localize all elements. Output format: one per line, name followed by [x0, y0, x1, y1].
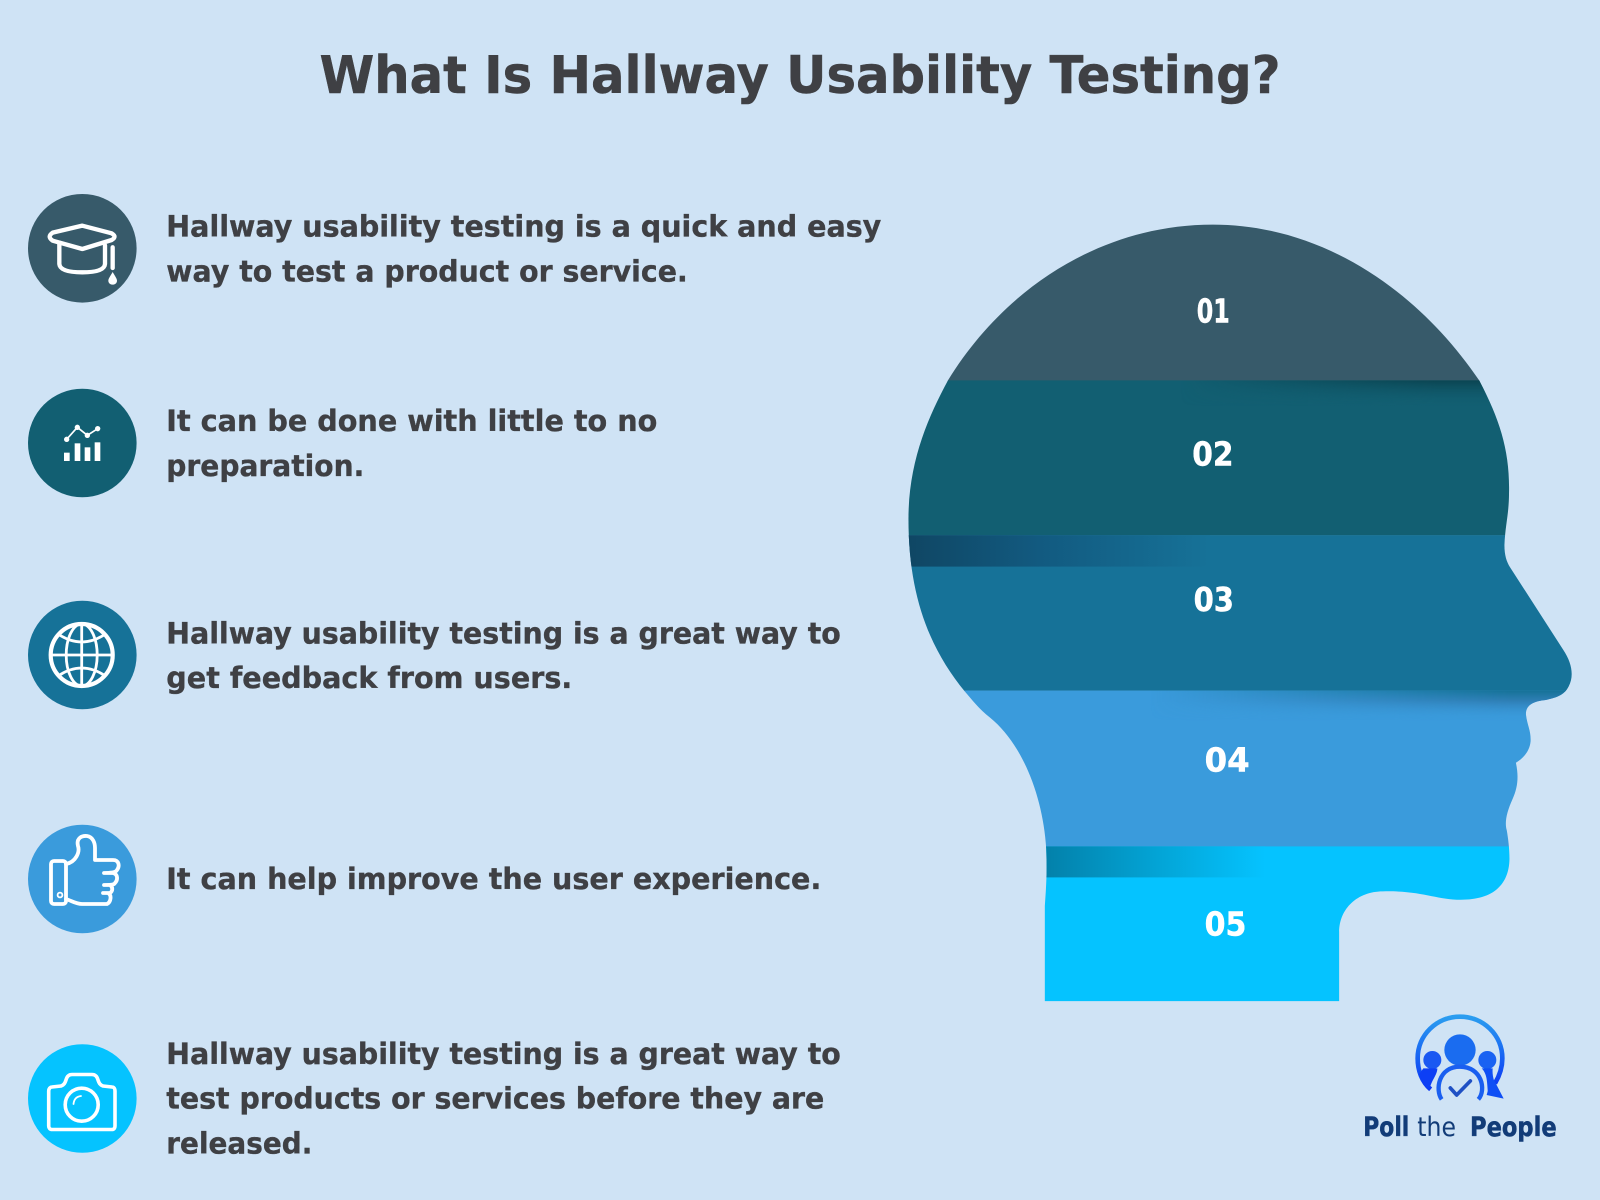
text: item 1: way to test a product or service.: [166, 254, 688, 288]
label 02: 02: [1192, 434, 1234, 473]
logo icon: [1418, 1017, 1504, 1099]
icon: graduation cap: [28, 194, 137, 303]
item 2: [28, 389, 657, 497]
icon: thumbs up: [28, 825, 137, 933]
label 04: 04: [1205, 740, 1250, 779]
text: item 2: It can be done with little to no: [166, 404, 657, 438]
label 01: 01: [1197, 292, 1230, 331]
logo wordmark: the: [1417, 1112, 1456, 1143]
item 4: [28, 825, 821, 933]
item 5: [28, 1037, 841, 1160]
text: item 1: Hallway usability testing is a quick and easy: [166, 210, 881, 244]
icon: chart: [28, 389, 137, 497]
head bands: [900, 215, 1600, 1006]
head diagram: [900, 215, 1600, 1006]
band 02: [908, 380, 1510, 536]
band 01: [948, 224, 1480, 380]
band 03: [900, 535, 1600, 691]
text: item 4: It can help improve the user experience.: [166, 862, 821, 896]
text: item 2: preparation.: [166, 449, 364, 483]
text: item 3: get feedback from users.: [166, 661, 572, 695]
icon: camera: [28, 1044, 137, 1153]
text: item 5: Hallway usability testing is a great way to: [166, 1037, 841, 1071]
label 03: 03: [1194, 580, 1234, 619]
logo wordmark: Poll: [1363, 1112, 1409, 1143]
item 3: [28, 601, 841, 709]
band 05: [1044, 846, 1510, 1002]
text: item 5: [166, 1037, 841, 1160]
text: item 2: [166, 404, 657, 483]
logo wordmark: People: [1470, 1112, 1557, 1143]
text: item 1: [166, 210, 881, 288]
text: item 5: released.: [166, 1126, 312, 1160]
item 1: [28, 194, 881, 303]
text: item 3: Hallway usability testing is a great way to: [166, 616, 841, 650]
band 04: [964, 690, 1566, 846]
logo wordmark: [1363, 1112, 1557, 1143]
text: item 3: [166, 616, 841, 695]
text: item 5: test products or services before they are: [166, 1082, 824, 1116]
label 05: 05: [1205, 905, 1246, 944]
logo: Poll the People: [1363, 1017, 1557, 1143]
title: What Is Hallway Usability Testing?: [320, 46, 1280, 106]
icon: globe: [28, 601, 137, 709]
